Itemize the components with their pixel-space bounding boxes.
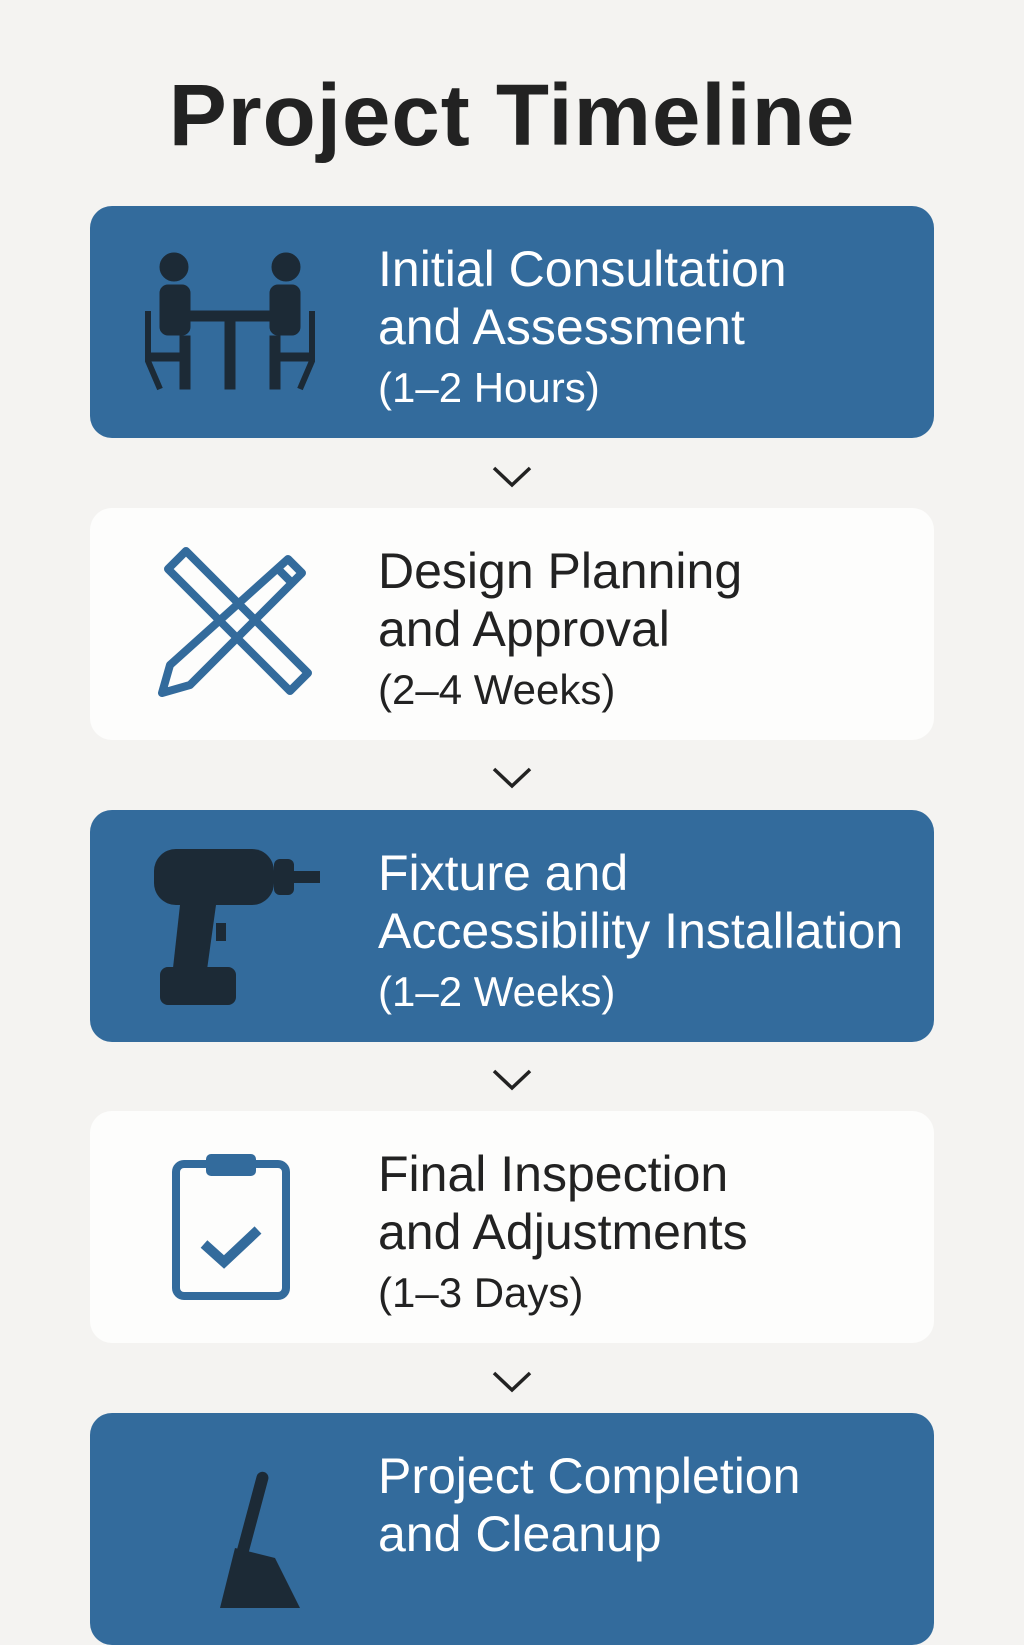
text: step 3: Accessibility Installation bbox=[378, 903, 903, 959]
arrow 4 bbox=[492, 1372, 532, 1392]
text: step 4 bbox=[378, 1146, 748, 1316]
text: step 2 bbox=[378, 543, 742, 713]
arrow 3 bbox=[492, 1070, 532, 1090]
icon: ruler and pencil bbox=[158, 547, 312, 697]
text: step 3 bbox=[378, 845, 903, 1015]
panel: step 2 bbox=[90, 508, 934, 740]
text: step 5 bbox=[378, 1448, 800, 1562]
title: Project Timeline bbox=[169, 67, 855, 164]
text: step 3: Fixture and bbox=[378, 845, 628, 901]
panel: step 1 bbox=[90, 206, 934, 438]
text: step 4: and Adjustments bbox=[378, 1204, 748, 1260]
panel: step 5 bbox=[90, 1413, 934, 1645]
text: step 2: Design Planning bbox=[378, 543, 742, 599]
icon: drill bbox=[154, 849, 320, 1005]
text: step 4: (1–3 Days) bbox=[378, 1269, 583, 1316]
icon: clipboard bbox=[172, 1154, 290, 1300]
text: step 3: (1–2 Weeks) bbox=[378, 968, 615, 1015]
icon: brush bbox=[220, 1472, 300, 1608]
text: step 1 bbox=[378, 241, 787, 411]
panel: step 4 bbox=[90, 1111, 934, 1343]
text: step 1: and Assessment bbox=[378, 299, 745, 355]
text: step 5: Project Completion bbox=[378, 1448, 800, 1504]
arrow 1 bbox=[492, 466, 532, 488]
text: step 2: and Approval bbox=[378, 601, 670, 657]
text: step 2: (2–4 Weeks) bbox=[378, 666, 615, 713]
arrow 2 bbox=[492, 768, 532, 788]
text: step 1: (1–2 Hours) bbox=[378, 364, 600, 411]
text: step 4: Final Inspection bbox=[378, 1146, 728, 1202]
icon: consultation bbox=[145, 252, 315, 390]
panel: step 3 bbox=[90, 810, 934, 1042]
text: step 1: Initial Consultation bbox=[378, 241, 787, 297]
text: step 5: and Cleanup bbox=[378, 1506, 662, 1562]
